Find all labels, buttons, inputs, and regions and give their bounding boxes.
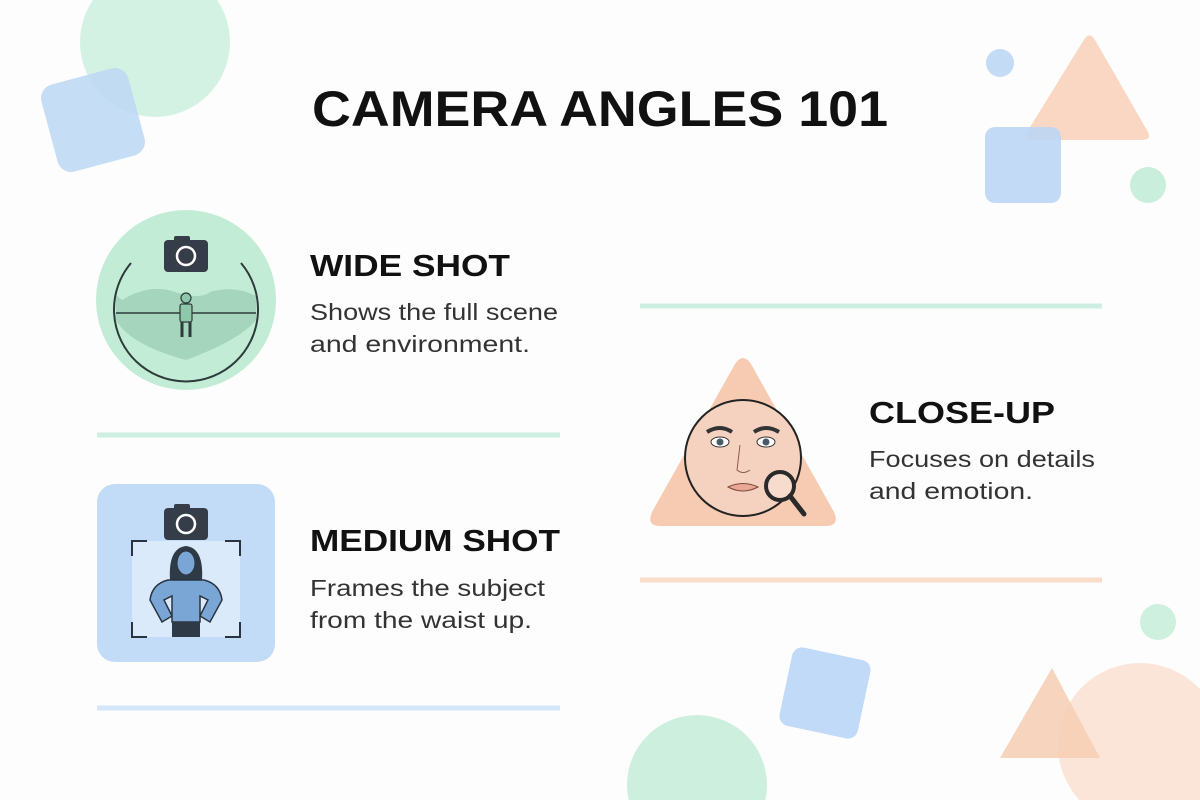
text: wide shot: and environment. <box>310 331 530 357</box>
heading: medium shot: MEDIUM SHOT <box>310 523 560 558</box>
text: wide shot: Shows the full scene <box>310 299 558 325</box>
text: close-up: and emotion. <box>869 478 1033 504</box>
text: medium shot: from the waist up. <box>310 607 532 633</box>
text: close-up: Focuses on details <box>869 446 1095 472</box>
heading: close-up: CLOSE-UP <box>869 395 1055 430</box>
heading: wide shot: WIDE SHOT <box>310 248 510 283</box>
icon: wide shot <box>96 210 276 390</box>
icon: close-up <box>650 358 836 526</box>
text: medium shot: Frames the subject <box>310 575 546 601</box>
icon: medium shot <box>97 484 275 662</box>
title: CAMERA ANGLES 101 <box>312 81 888 137</box>
dividers <box>97 432 560 438</box>
